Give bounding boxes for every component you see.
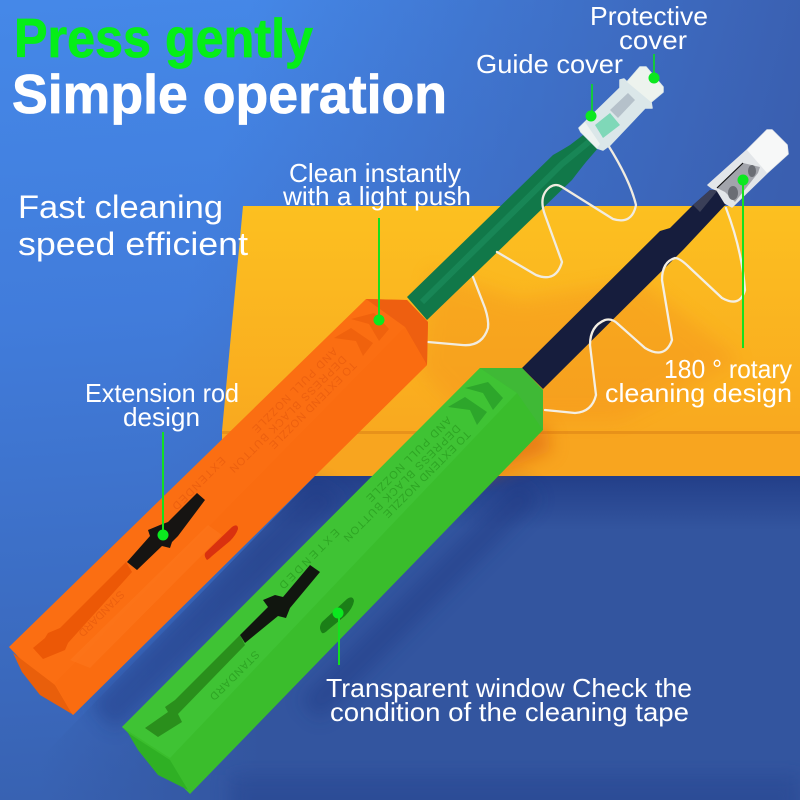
orange pen embossed text: STANDARD [75, 588, 126, 639]
orange pen transparent window [205, 525, 238, 560]
callout: extension rod design: Extension rod [85, 378, 239, 408]
callout: clean instantly: Clean instantly [289, 158, 461, 188]
callout: guide cover [476, 49, 623, 122]
callout: guide cover: Guide cover [476, 49, 623, 79]
navy shaft [522, 190, 728, 389]
callout: transparent window: condition of the cleaning tape [330, 697, 689, 727]
right pen wire loops [545, 208, 745, 413]
green pen slot [145, 565, 320, 737]
green pen embossed text [207, 414, 472, 702]
green pen embossed text: DEPRESS BLACK BUTTON [341, 422, 462, 544]
callout: 180 degree rotary cleaning design: 180 ° rotary [664, 354, 792, 384]
orange pen embossed text: DEPRESS BLACK BUTTON [227, 353, 348, 475]
orange pen chevrons [334, 313, 389, 356]
callout: 180 degree rotary cleaning design [605, 174, 792, 408]
title: Simple operation: Simple operation [12, 63, 447, 125]
orange pen embossed text: TO EXTEND NOZZLE [266, 359, 358, 451]
callout: extension rod design [85, 378, 239, 540]
green pen embossed text: TO EXTEND NOZZLE [380, 428, 472, 520]
yellow folder panel [222, 206, 800, 476]
pen shadows on blue background [90, 480, 540, 730]
text: Fast cleaning speed efficient [18, 189, 248, 262]
text: Fast cleaning speed efficient: speed efficient [18, 226, 248, 262]
orange pen body [9, 299, 428, 715]
guide and protective cover, green pen [579, 67, 663, 150]
green pen embossed text: EXTENDED [276, 526, 341, 591]
callout: extension rod design: design [123, 402, 200, 432]
callout: clean instantly [282, 158, 471, 326]
cover, navy pen [708, 130, 788, 207]
orange pen wire loops [428, 145, 636, 345]
green pen embossed text: STANDARD [207, 648, 261, 702]
callout: protective cover [590, 1, 708, 84]
callout: transparent window: Transparent window Check the [326, 673, 692, 703]
callout: clean instantly: with a light push [282, 181, 471, 211]
green pen embossed text: AND PULL NOZZLE [364, 414, 453, 504]
orange pen embossed text [75, 345, 358, 639]
green pen chevrons [448, 382, 503, 425]
green pen transparent window [320, 597, 354, 633]
callout: 180 degree rotary cleaning design: cleaning design [605, 378, 792, 408]
orange pen embossed text: EXTENDED [169, 454, 227, 512]
orange pen embossed text: AND PULL NOZZLE [250, 345, 339, 435]
callout: protective cover: cover [619, 25, 687, 55]
orange pen green shaft [407, 132, 599, 320]
title: Press gently: Press gently [14, 7, 313, 69]
callout: protective cover: Protective [590, 1, 708, 31]
green pen body [122, 368, 543, 794]
callout: transparent window [326, 608, 692, 727]
text: Fast cleaning speed efficient: Fast cleaning [18, 189, 223, 225]
orange pen slot [33, 493, 205, 659]
